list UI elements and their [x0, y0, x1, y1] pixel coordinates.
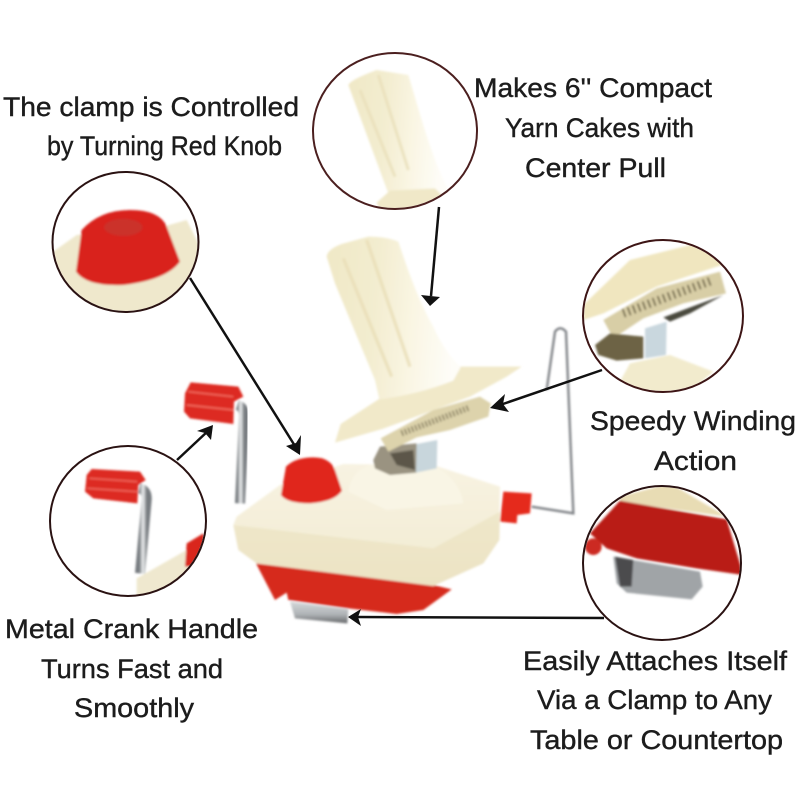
circle outline — [583, 240, 743, 392]
metal clamp foot — [290, 602, 348, 623]
circle callout: red knob — [52, 172, 203, 313]
flange disc — [335, 367, 522, 443]
circle outline — [52, 172, 198, 312]
grip ridges — [187, 392, 233, 410]
label: metal crank — [5, 614, 258, 723]
arrow: to clamp — [348, 609, 604, 626]
label: clamp attach — [523, 646, 788, 755]
base underside in red — [256, 563, 452, 614]
label: yarn cakes: Makes 6'' Compact — [474, 73, 713, 103]
spool ribs — [343, 240, 410, 377]
label: clamp attach: Easily Attaches Itself — [523, 646, 788, 676]
arrow: to gear — [490, 370, 602, 412]
crank red grip — [184, 382, 243, 424]
circle callout: clamp — [583, 483, 743, 640]
circle callout: crank handle — [50, 446, 210, 597]
dark collar gap — [390, 450, 415, 470]
label: clamp control: by Turning Red Knob — [47, 131, 282, 161]
label: clamp attach: Via a Clamp to Any — [537, 685, 773, 715]
label: yarn cakes — [474, 73, 713, 183]
label: metal crank: Turns Fast and — [41, 654, 223, 684]
main product: yarn winder — [233, 237, 573, 623]
arrow: to crank — [177, 425, 213, 460]
arrow: to spool — [421, 207, 440, 306]
label: speedy winding: Action — [654, 446, 737, 476]
label: yarn cakes: Yarn Cakes with — [505, 113, 694, 143]
blue-grey bracket face — [416, 440, 437, 473]
label: speedy winding: Speedy Winding — [590, 406, 796, 436]
label: yarn cakes: Center Pull — [525, 153, 666, 183]
spool close-up — [348, 70, 448, 210]
label: clamp control — [3, 92, 299, 161]
circle callout: winding gear — [583, 240, 743, 397]
circle outline — [50, 446, 206, 596]
gear close-up — [583, 243, 727, 397]
circle callout: spool detail — [313, 53, 477, 210]
swift wire arm — [532, 328, 573, 513]
clamp close-up — [585, 483, 743, 599]
crank close-up — [85, 469, 210, 597]
spool — [327, 237, 461, 399]
knob close-up — [53, 210, 203, 313]
label: metal crank: Metal Crank Handle — [5, 614, 258, 644]
gear wheel — [381, 397, 491, 452]
circle outline — [583, 486, 741, 640]
gear teeth — [402, 407, 470, 433]
label: clamp control: The clamp is Controlled — [3, 92, 299, 122]
base pedestal — [348, 463, 463, 510]
metal axle collar — [373, 443, 417, 475]
label: metal crank: Smoothly — [74, 693, 195, 723]
arrow: to knob — [190, 278, 301, 455]
cream base top — [233, 464, 500, 550]
label: clamp attach: Table or Countertop — [530, 725, 783, 755]
label: speedy winding — [590, 406, 796, 476]
crank handle on main product — [184, 382, 244, 503]
red knob — [281, 457, 342, 503]
red wire holder — [500, 492, 532, 523]
cream base front — [233, 512, 500, 586]
circle outline — [313, 53, 477, 209]
crank wire — [237, 405, 244, 503]
